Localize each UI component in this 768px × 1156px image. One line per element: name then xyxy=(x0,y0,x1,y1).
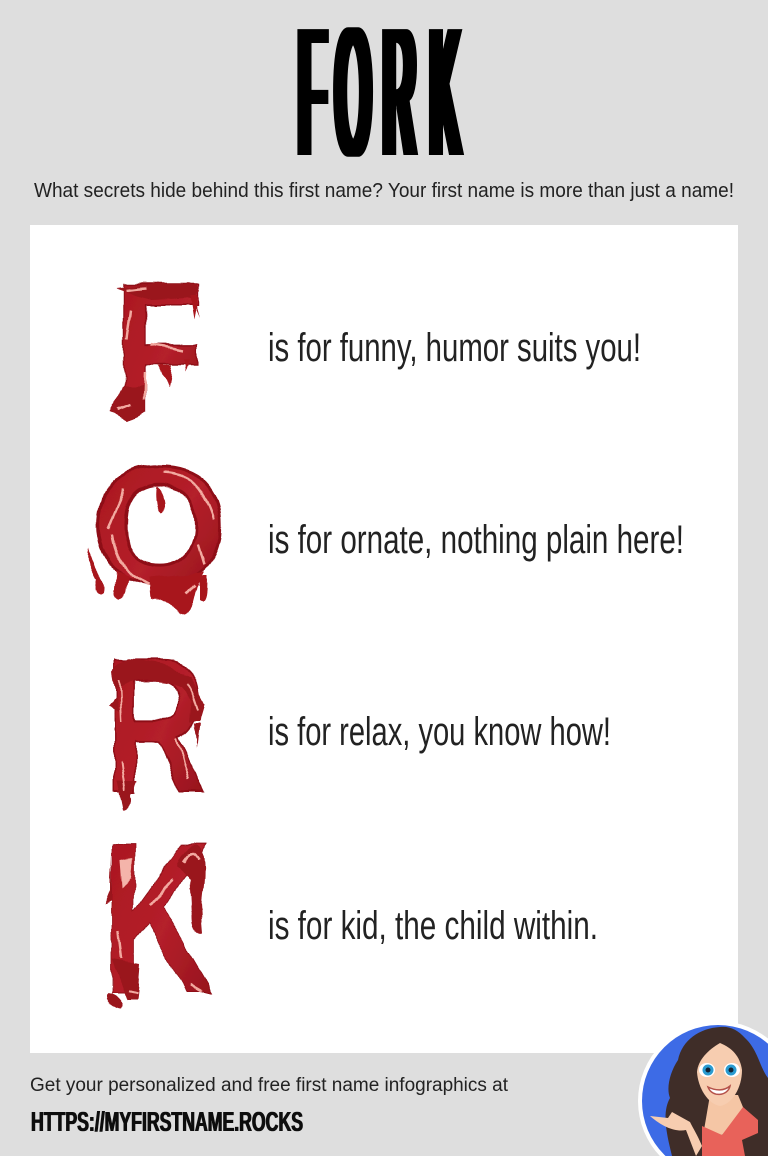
icon: blood letter O: O xyxy=(92,431,228,619)
description: R: is for relax, you know how! xyxy=(268,710,611,754)
icon: blood letter K: K xyxy=(101,797,214,1038)
hand xyxy=(650,1112,702,1156)
avatar ring xyxy=(638,1021,768,1156)
footer url: HTTPS://MYFIRSTNAME.ROCKS xyxy=(31,1106,303,1137)
hair xyxy=(666,1027,768,1156)
face xyxy=(697,1043,742,1106)
footer line: Get your personalized and free first name infographics at xyxy=(30,1075,509,1096)
icon: blood letter F: F xyxy=(114,245,204,452)
mouth xyxy=(708,1086,730,1094)
description: K: is for kid, the child within. xyxy=(268,904,598,948)
panel: white card xyxy=(30,225,738,1053)
description: F: is for funny, humor suits you! xyxy=(268,326,641,370)
icon: blood letter R: R xyxy=(106,618,206,833)
neck and chest xyxy=(704,1095,745,1135)
subtitle: What secrets hide behind this first name? Your first name is more than just a name! xyxy=(34,180,734,202)
avatar illustration xyxy=(640,1020,768,1156)
shirt xyxy=(702,1107,758,1156)
eyes xyxy=(699,1063,740,1077)
